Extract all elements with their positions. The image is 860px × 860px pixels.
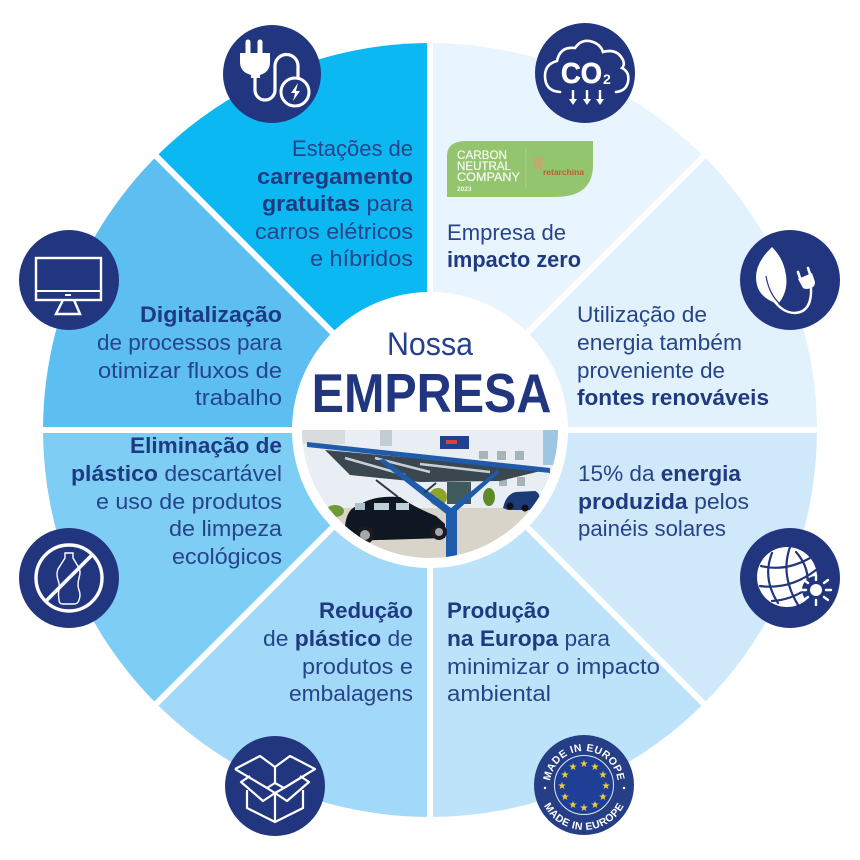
icon: made in Europe seal: ★ xyxy=(591,762,600,773)
icon: made in Europe seal: ★ xyxy=(569,762,578,773)
text: production in Europe xyxy=(447,598,660,706)
text: charging stations xyxy=(255,136,414,271)
panel: digitalization xyxy=(43,156,430,430)
panel: charging stations xyxy=(156,43,430,430)
text: charging stations: carregamento xyxy=(257,164,413,189)
text: charging stations: carros elétricos xyxy=(255,219,413,244)
text: solar energy: produzida pelos xyxy=(578,489,749,514)
text: plastic elimination: e uso de produtos xyxy=(96,489,282,514)
text: solar energy: 15% da energia xyxy=(578,461,742,486)
badge: carbon neutral company: COMPANY xyxy=(457,172,520,184)
text: solar energy xyxy=(578,461,749,541)
text: solar energy: painéis solares xyxy=(578,516,726,541)
icon: globe and sun xyxy=(740,528,840,628)
text: production in Europe: na Europa para xyxy=(447,626,611,651)
heading: Nossa: Nossa xyxy=(387,326,473,362)
panel: plastic elimination xyxy=(43,430,430,704)
panel: carbon neutral xyxy=(430,43,704,430)
icon: made in Europe seal: ★ xyxy=(602,781,611,792)
icon: leaf plug xyxy=(740,230,840,330)
panel: plastic reduction xyxy=(156,430,430,817)
icon: open box xyxy=(225,736,325,836)
badge: carbon neutral company: retarchina xyxy=(543,168,585,177)
text: zero impact xyxy=(447,220,581,272)
icon: made in Europe seal: ★ xyxy=(558,781,567,792)
text: zero impact: impacto zero xyxy=(447,247,581,272)
text: digitalization xyxy=(97,302,283,410)
badge: carbon neutral company xyxy=(447,141,593,197)
icon: made in Europe seal: ★ xyxy=(599,770,608,781)
icon: CO2 cloud: CO xyxy=(561,58,602,90)
text: zero impact: Empresa de xyxy=(447,220,566,245)
text: digitalization: de processos para xyxy=(97,330,283,355)
text: plastic reduction: produtos e xyxy=(302,654,413,679)
panel: renewable energy xyxy=(430,156,817,430)
text: digitalization: trabalho xyxy=(195,385,282,410)
icon: made in Europe seal: MADE IN EUROPE xyxy=(544,802,624,830)
icon: made in Europe seal: ★ xyxy=(561,792,570,803)
text: charging stations: gratuitas para xyxy=(262,191,414,216)
text: plastic reduction: de plástico de xyxy=(263,626,413,651)
badge: carbon neutral company: 2023 xyxy=(457,186,472,193)
text: production in Europe: ambiental xyxy=(447,681,551,706)
text: production in Europe: Produção xyxy=(447,598,550,623)
icon: made in Europe seal: ★ xyxy=(599,792,608,803)
photo: solar carport xyxy=(300,430,560,560)
text: plastic elimination: Eliminação de xyxy=(130,433,282,458)
panel: solar panels xyxy=(430,430,817,704)
icon: made in Europe seal xyxy=(534,735,634,835)
text: plastic elimination: plástico descartável xyxy=(71,461,282,486)
icon: made in Europe seal: ★ xyxy=(580,759,589,770)
icon: made in Europe seal: ★ xyxy=(591,800,600,811)
icon: made in Europe seal: MADE IN EUROPE xyxy=(543,744,625,780)
icon: made in Europe seal: ★ xyxy=(569,800,578,811)
icon: no plastic bottle xyxy=(19,528,119,628)
text: plastic elimination: ecológicos xyxy=(172,544,282,569)
center circle xyxy=(292,292,568,568)
icon: computer monitor xyxy=(19,230,119,330)
icon: CO2 cloud: 2 xyxy=(603,71,611,87)
text: renewable energy xyxy=(577,302,769,410)
text: plastic reduction xyxy=(263,598,413,706)
text: plastic elimination xyxy=(71,433,283,569)
text: renewable energy: Utilização de xyxy=(577,302,707,327)
badge: carbon neutral company: NEUTRAL xyxy=(457,161,512,173)
badge: carbon neutral company: CARBON xyxy=(457,150,507,162)
text: digitalization: Digitalização xyxy=(140,302,282,327)
panel: made in Europe xyxy=(430,430,704,817)
text: plastic reduction: Redução xyxy=(319,598,413,623)
text: plastic reduction: embalagens xyxy=(289,681,413,706)
text: production in Europe: minimizar o impacto xyxy=(447,654,660,679)
text: renewable energy: proveniente de xyxy=(577,358,725,383)
icon: made in Europe seal: ★ xyxy=(580,803,589,814)
heading: EMPRESA: EMPRESA xyxy=(312,362,551,424)
icon: made in Europe seal: ★ xyxy=(561,770,570,781)
icon: CO2 cloud xyxy=(535,23,635,123)
text: renewable energy: fontes renováveis xyxy=(577,385,769,410)
text: digitalization: otimizar fluxos de xyxy=(98,358,282,383)
text: renewable energy: energia também xyxy=(577,330,742,355)
icon: charging plug xyxy=(223,25,321,123)
text: charging stations: Estações de xyxy=(292,136,413,161)
text: charging stations: e híbridos xyxy=(310,246,413,271)
text: plastic elimination: de limpeza xyxy=(169,516,283,541)
